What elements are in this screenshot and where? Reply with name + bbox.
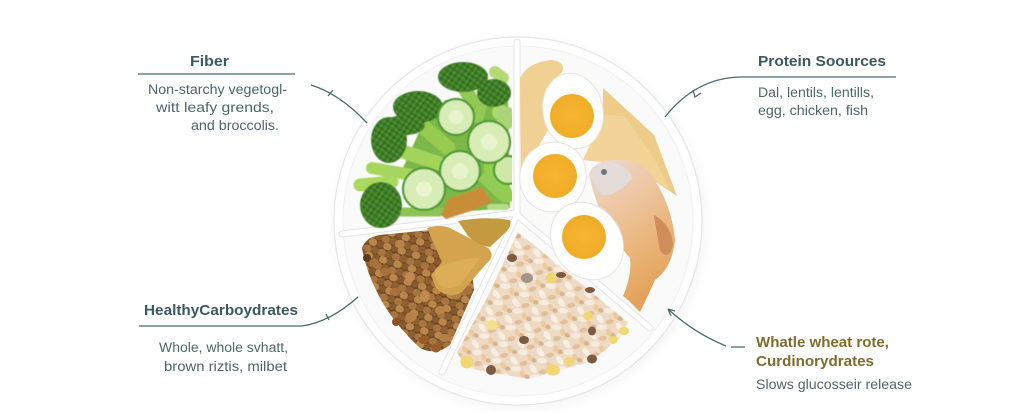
text: carbohydrates description bbox=[159, 340, 288, 374]
text: fiber description: Non-starchy vegetogl- bbox=[148, 82, 287, 97]
flatbread bbox=[520, 60, 677, 196]
arrow: carbohydrates bbox=[139, 297, 358, 326]
heading: fiber: Fiber bbox=[190, 53, 229, 70]
egg bottom bbox=[536, 188, 638, 294]
egg top bbox=[536, 68, 610, 154]
heading: carbohydrates: HealthyCarboydrates bbox=[144, 302, 298, 319]
stalks bbox=[360, 72, 508, 212]
text: whole wheat description: Slows glucosseir release bbox=[756, 377, 912, 392]
text: protein description bbox=[758, 85, 874, 118]
callout: protein sources bbox=[665, 53, 896, 118]
arrow: fiber bbox=[311, 85, 367, 123]
text: protein description: egg, chicken, fish bbox=[758, 103, 868, 118]
text: protein description: Dal, lentils, lentills, bbox=[758, 85, 874, 100]
text: fiber description: and broccolis. bbox=[191, 118, 279, 133]
crouton bbox=[441, 187, 492, 219]
text: carbohydrates description: Whole, whole svhatt, bbox=[159, 340, 288, 355]
lentil details bbox=[363, 240, 472, 352]
panel: whole grains bbox=[457, 232, 629, 379]
broccoli florets bbox=[360, 62, 511, 228]
panel: healthy carbohydrates lentils bbox=[362, 230, 474, 352]
heading: protein: Protein Soources bbox=[758, 53, 886, 70]
callout: fiber bbox=[138, 53, 367, 133]
arrow: protein bbox=[665, 77, 896, 117]
text: carbohydrates description: brown riztis, milbet bbox=[164, 359, 287, 374]
fish bbox=[589, 160, 675, 312]
chicken bbox=[427, 218, 510, 295]
plate bbox=[334, 37, 704, 408]
grain highlights bbox=[460, 272, 629, 376]
panel: fiber vegetables bbox=[360, 62, 522, 228]
callout: healthy carbohydrates bbox=[139, 297, 358, 374]
callout: whole wheat bbox=[668, 309, 912, 392]
heading: whole wheat bbox=[756, 334, 889, 370]
heading: whole wheat: Whatle wheat rote, bbox=[756, 334, 889, 351]
arrow: whole wheat bbox=[668, 309, 745, 347]
text: fiber description bbox=[148, 82, 287, 133]
panel: protein sources bbox=[510, 60, 677, 312]
egg middle bbox=[510, 133, 596, 221]
heading: whole wheat: Curdinorydrates bbox=[756, 353, 874, 370]
plate dividers bbox=[342, 42, 650, 372]
cucumber slices bbox=[403, 99, 522, 210]
text: fiber description: witt leafy grends, bbox=[155, 100, 274, 115]
